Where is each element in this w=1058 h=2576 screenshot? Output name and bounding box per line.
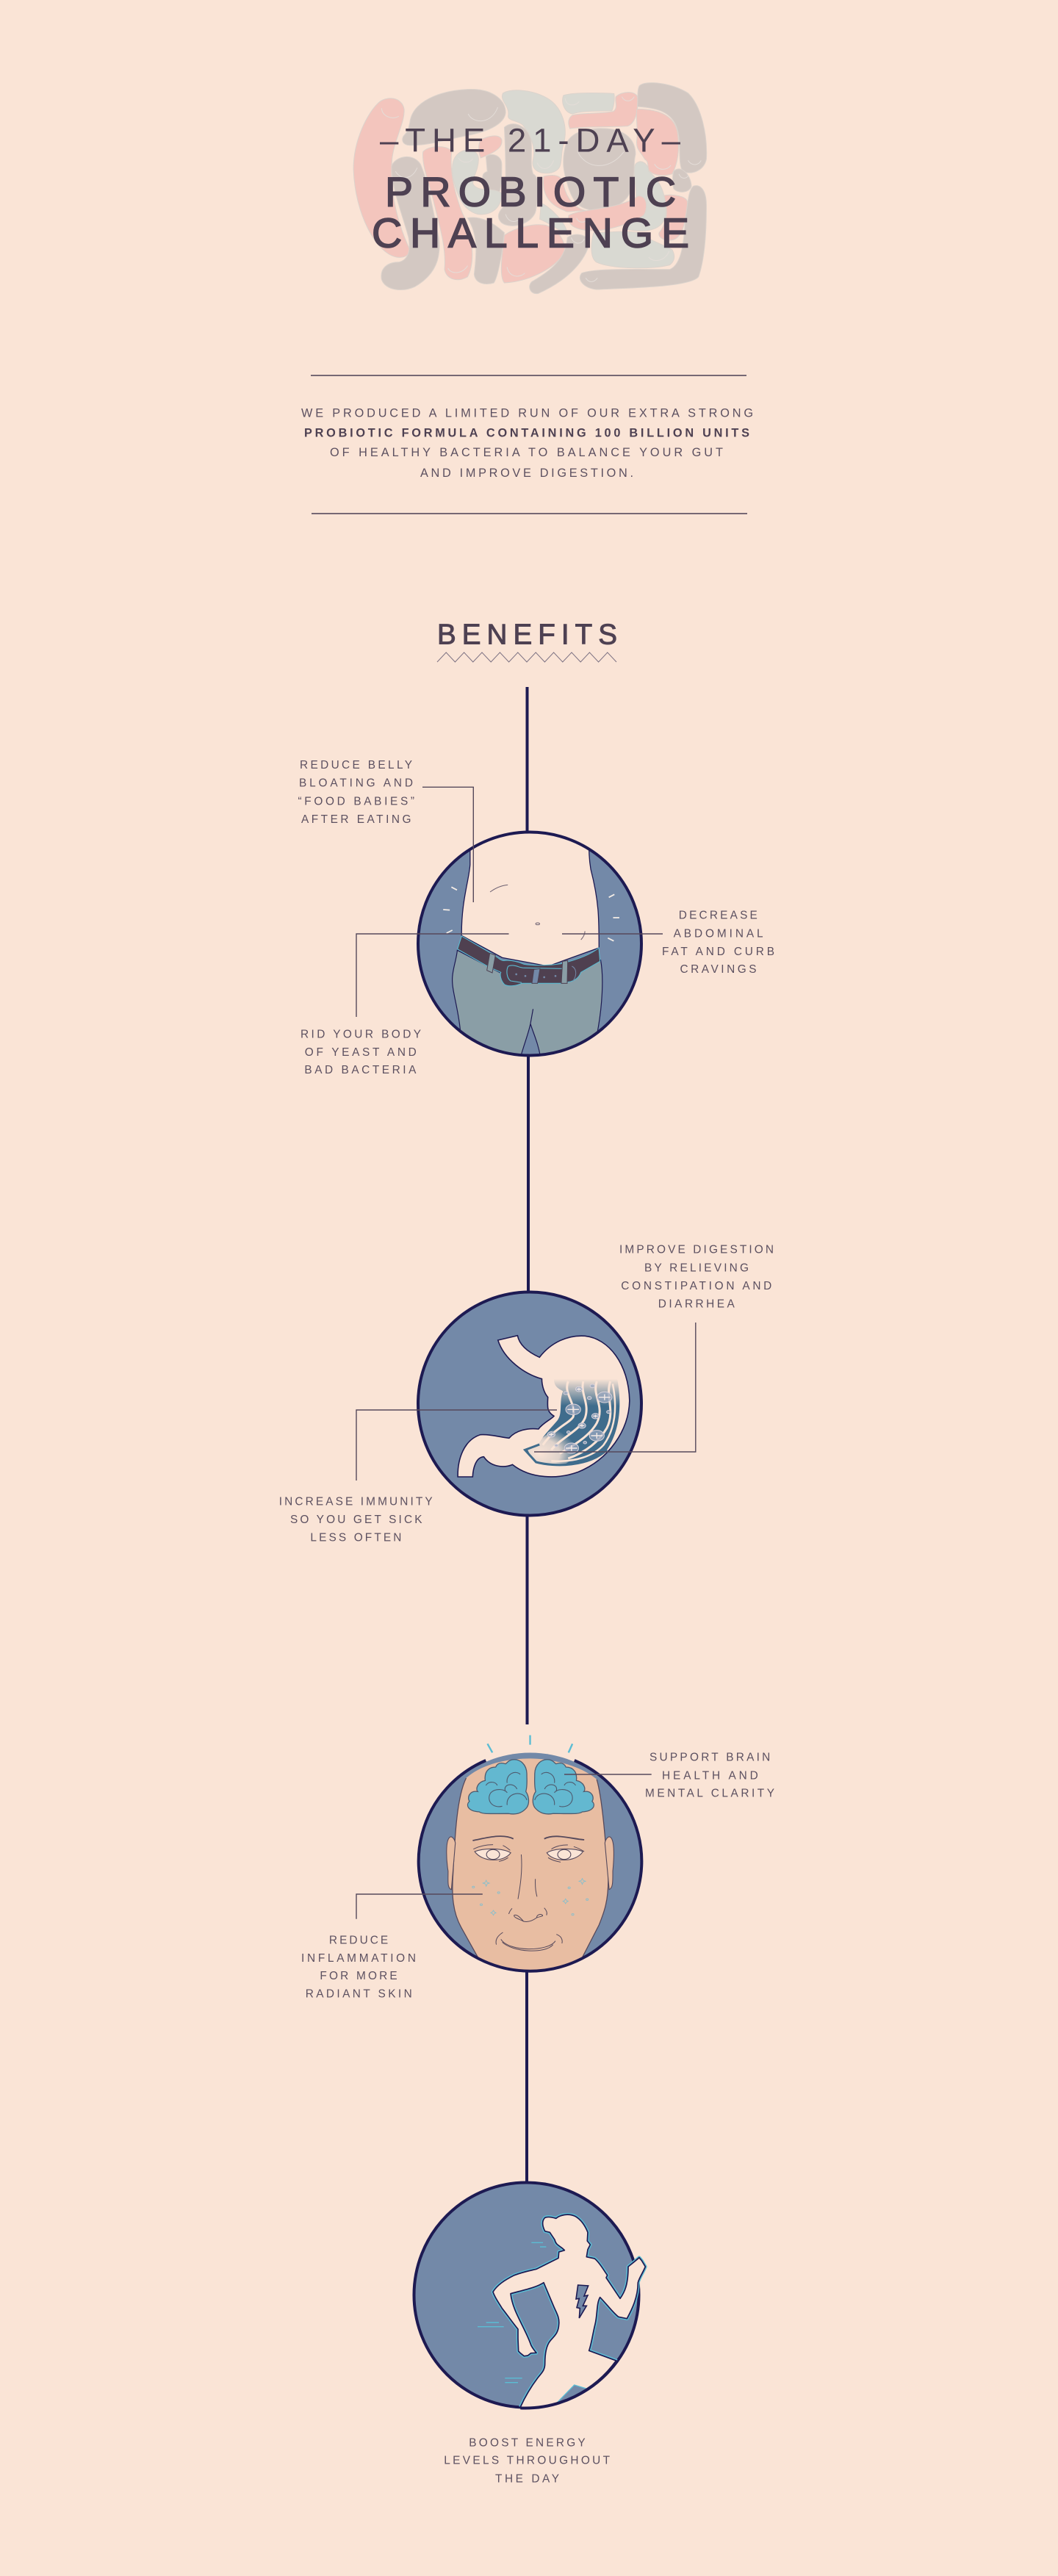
callout: rid your body: BAD BACTERIA <box>304 1064 417 1076</box>
panel: energy benefit <box>414 2182 645 2485</box>
callout: rid your body: OF YEAST AND <box>305 1046 417 1059</box>
callout: improve digestion: CONSTIPATION AND <box>621 1280 771 1292</box>
icon: face with brain <box>453 1758 608 1979</box>
title illustration: smiling gut bacteria <box>353 83 707 294</box>
intro text block: OF HEALTHY BACTERIA TO BALANCE YOUR GUT <box>330 446 723 459</box>
panel: digestion benefit <box>279 1244 774 1544</box>
callout: improve digestion: DIARRHEA <box>658 1298 735 1311</box>
callout: reduce inflammation <box>301 1894 483 2001</box>
callout: reduce belly bloating <box>298 759 473 902</box>
icon: stomach with probiotics <box>458 1336 630 1477</box>
callout: reduce inflammation: RADIANT SKIN <box>306 1988 412 2001</box>
stomach circle <box>418 1292 641 1515</box>
callout: boost energy <box>444 2436 611 2485</box>
callout: decrease abdominal fat: ABDOMINAL <box>674 927 763 940</box>
callout: increase immunity <box>279 1410 557 1544</box>
timeline connector 1 <box>526 687 529 832</box>
callout: reduce belly bloating: AFTER EATING <box>301 813 411 826</box>
timeline connector 3 <box>526 1516 529 1724</box>
callout: increase immunity: SO YOU GET SICK <box>290 1514 422 1526</box>
callout: reduce inflammation: FOR MORE <box>320 1970 397 1982</box>
head circle background <box>419 1753 641 1972</box>
panel: belly benefit <box>298 759 774 1076</box>
icon: runner silhouette <box>478 2215 645 2408</box>
icon: belly and belt <box>443 825 619 1060</box>
panel: brain and skin benefit <box>301 1735 774 2001</box>
callout: reduce belly bloating: “FOOD BABIES” <box>298 795 414 807</box>
callout: decrease abdominal fat: DECREASE <box>679 910 757 922</box>
callout: reduce inflammation: INFLAMMATION <box>301 1952 416 1965</box>
belly circle ring <box>418 832 641 1055</box>
callout: reduce belly bloating: BLOATING AND <box>299 777 413 790</box>
callout: decrease abdominal fat: FAT AND CURB <box>662 946 774 958</box>
intro text block: WE PRODUCED A LIMITED RUN OF OUR EXTRA STRONG <box>301 406 753 420</box>
callout: boost energy: BOOST ENERGY <box>469 2436 586 2449</box>
title: probiotic: PROBIOTIC <box>385 169 676 216</box>
callout: boost energy: LEVELS THROUGHOUT <box>444 2455 611 2467</box>
intro text block: PROBIOTIC FORMULA CONTAINING 100 BILLION UNITS <box>304 426 749 439</box>
callout: reduce belly bloating: REDUCE BELLY <box>300 759 412 771</box>
callout: reduce inflammation: REDUCE <box>329 1934 388 1946</box>
callout: support brain health <box>564 1752 774 1799</box>
callout: improve digestion: IMPROVE DIGESTION <box>619 1244 774 1256</box>
callout: improve digestion <box>534 1244 774 1452</box>
heading: benefits: BENEFITS <box>437 619 617 651</box>
title: the 21-day: –THE 21-DAY– <box>380 122 681 159</box>
head details <box>419 1735 641 1971</box>
callout: support brain health: SUPPORT BRAIN <box>649 1752 770 1764</box>
timeline connector 4 <box>525 1971 528 2182</box>
runner circle <box>414 2182 639 2407</box>
callout: decrease abdominal fat: CRAVINGS <box>680 963 757 976</box>
belt <box>458 936 600 986</box>
heading zigzag underline <box>437 652 616 662</box>
belly circle background <box>418 832 641 1055</box>
callout: decrease abdominal fat <box>562 910 774 976</box>
callout: support brain health: MENTAL CLARITY <box>645 1787 774 1799</box>
callout: rid your body: RID YOUR BODY <box>301 1029 421 1041</box>
intro text block: AND IMPROVE DIGESTION. <box>420 467 633 480</box>
callout: improve digestion: BY RELIEVING <box>644 1262 749 1274</box>
callout: support brain health: HEALTH AND <box>662 1769 758 1782</box>
intro text block <box>301 406 753 480</box>
timeline connector 2 <box>527 1056 530 1292</box>
callout: boost energy: THE DAY <box>495 2472 559 2485</box>
callout: rid your body <box>301 934 508 1076</box>
callout: increase immunity: INCREASE IMMUNITY <box>279 1495 433 1508</box>
title: challenge: CHALLENGE <box>372 210 689 257</box>
callout: increase immunity: LESS OFTEN <box>310 1532 401 1544</box>
